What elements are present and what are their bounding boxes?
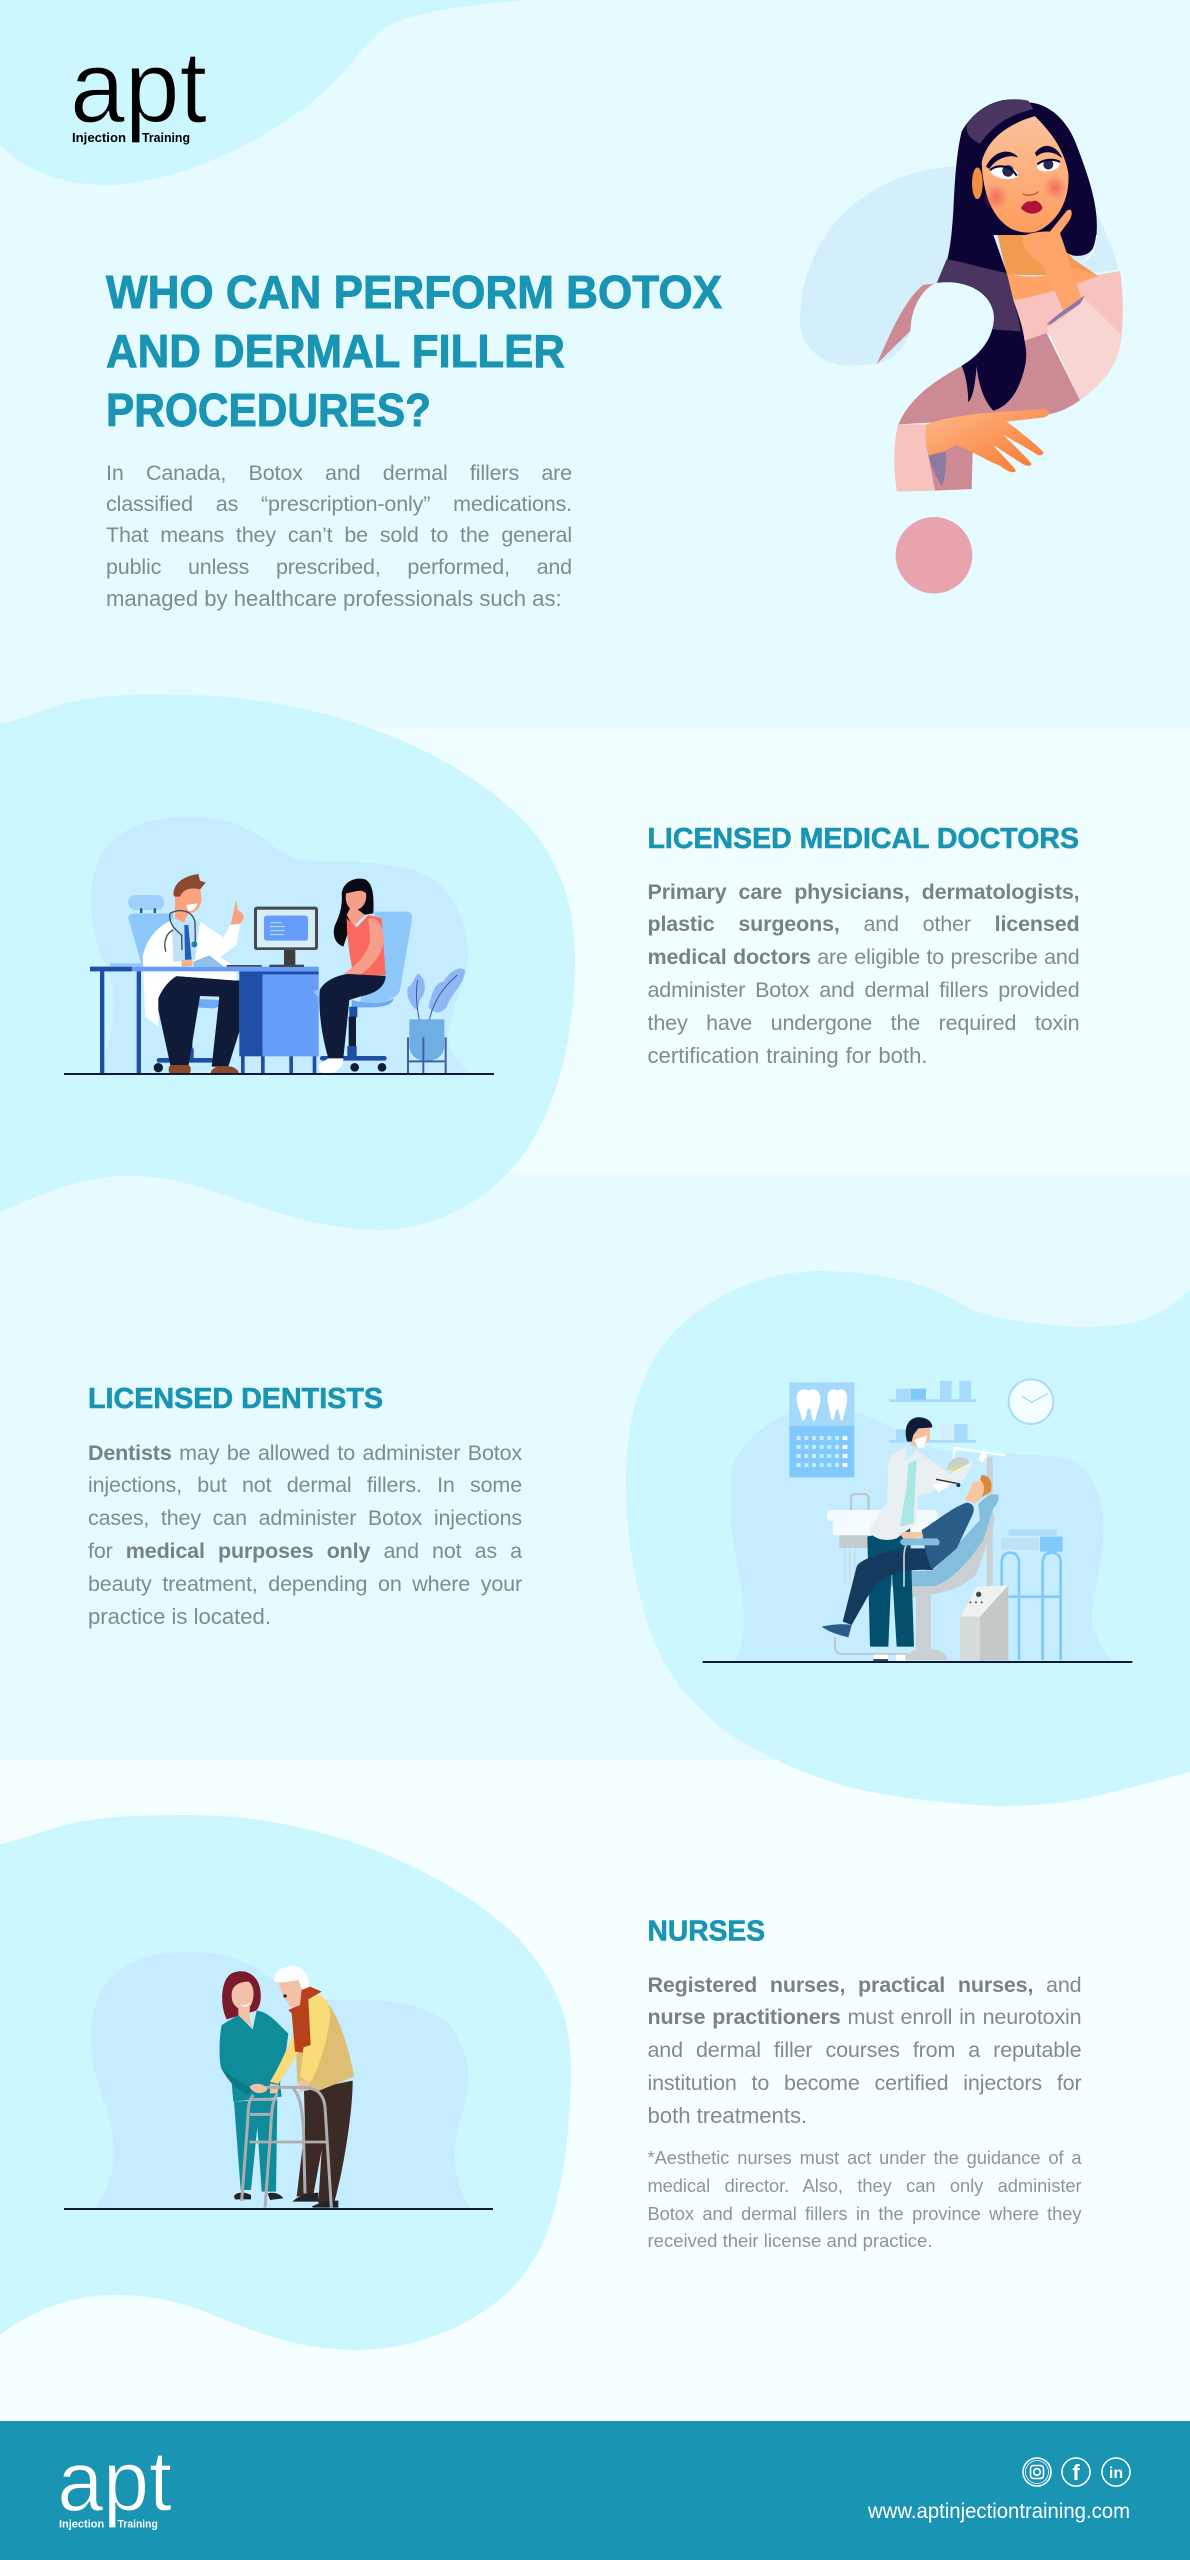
intro paragraph: managed by healthcare professionals such as: xyxy=(106,586,562,611)
intro paragraph: classified as “prescription-only” medications. xyxy=(106,492,572,516)
heading: licensed medical doctors: LICENSED MEDICAL DOCTORS xyxy=(648,823,1079,855)
footer logo: Training xyxy=(118,2518,158,2530)
doctor xyxy=(143,874,244,1074)
walker xyxy=(242,2084,331,2208)
patient xyxy=(822,1475,992,1637)
intro paragraph xyxy=(106,461,572,611)
equipment box xyxy=(960,1585,1008,1661)
blob: doctors background xyxy=(0,694,575,1230)
footer logo: Injection xyxy=(59,2518,104,2530)
social icons xyxy=(1022,2457,1131,2487)
elderly man xyxy=(270,1966,354,2208)
side table xyxy=(1002,1553,1062,1660)
text: nurses footnote: *Aesthetic nurses must act under the guidance of a xyxy=(648,2147,1082,2168)
blob: top left xyxy=(0,0,522,185)
shelves xyxy=(889,1381,976,1443)
intro paragraph: In Canada, Botox and dermal fillers are xyxy=(106,461,572,485)
text: nurses footnote: medical director. Also, they can only administer xyxy=(648,2175,1082,2196)
blue blob xyxy=(800,166,1118,366)
text: doctors: Primary care physicians, dermatologists, xyxy=(648,880,1080,904)
text: doctors: administer Botox and dermal fillers provided xyxy=(648,978,1080,1002)
heading: nurses: NURSES xyxy=(648,1916,765,1948)
text: nurses footnote: received their license and practice. xyxy=(648,2230,932,2251)
text: nurses footnote: Botox and dermal fillers in the province where they xyxy=(648,2202,1082,2224)
text: doctors: medical doctors are eligible to prescribe and xyxy=(648,945,1080,969)
text: doctors xyxy=(648,880,1080,1068)
text: dentists: cases, they can administer Botox injections xyxy=(88,1506,522,1530)
text: doctors: certification training for both. xyxy=(648,1043,928,1068)
hair xyxy=(937,99,1097,411)
inner blob: nurses xyxy=(91,1952,470,2208)
patient xyxy=(318,879,386,1074)
dentist xyxy=(867,1417,987,1662)
text: dentists: practice is located. xyxy=(88,1604,271,1629)
hair lower strand xyxy=(962,330,1026,411)
text: nurses footnote xyxy=(648,2147,1082,2251)
lamp arm xyxy=(947,1448,1005,1587)
icon: facebook: f xyxy=(1072,2460,1080,2485)
doctor chair xyxy=(128,895,223,1072)
footer xyxy=(0,2421,1190,2560)
desk xyxy=(100,971,319,1074)
intro paragraph: public unless prescribed, performed, and xyxy=(106,555,572,579)
tooth poster xyxy=(789,1382,854,1477)
illustration: nurse and elderly man xyxy=(220,1966,354,2208)
hand on chin xyxy=(1022,210,1085,325)
icon: linkedin: in xyxy=(1109,2465,1123,2482)
section background: dentists xyxy=(0,1173,1190,1760)
title: WHO CAN PERFORM BOTOX xyxy=(106,266,722,318)
section background: intro xyxy=(0,0,1190,728)
intro paragraph: That means they can’t be sold to the general xyxy=(106,523,572,547)
text: dentists xyxy=(88,1441,522,1629)
clock xyxy=(1009,1379,1053,1424)
patient chair xyxy=(313,912,412,1072)
dental chair xyxy=(835,1494,999,1660)
illustration: woman in question mark xyxy=(800,99,1123,594)
logo: apt injection training: Injection xyxy=(72,130,126,145)
nurse xyxy=(220,1971,288,2200)
text: dentists: beauty treatment, depending on where your xyxy=(88,1572,522,1596)
text: nurses xyxy=(648,1972,1082,2128)
text: doctors: they have undergone the required toxin xyxy=(648,1011,1080,1035)
text: doctors: plastic surgeons, and other licensed xyxy=(648,912,1080,936)
title: AND DERMAL FILLER xyxy=(106,325,565,377)
icon: instagram xyxy=(1023,2458,1051,2486)
section background: nurses xyxy=(0,1760,1190,2421)
inner blob: doctors xyxy=(91,817,470,1073)
plant xyxy=(407,968,465,1074)
blob: dentists background xyxy=(626,1271,1190,1806)
clothing xyxy=(877,271,1123,492)
question mark dot xyxy=(896,517,972,593)
title xyxy=(106,266,722,436)
neck and chest xyxy=(997,232,1098,300)
inner blob: dentists xyxy=(730,1412,1111,1661)
text: dentists: injections, but not dermal fillers. In some xyxy=(88,1473,522,1497)
ground line xyxy=(703,1661,1132,1663)
title: PROCEDURES? xyxy=(106,384,431,436)
illustration: doctor and patient xyxy=(64,874,494,1075)
text: nurses: Registered nurses, practical nurses, and xyxy=(648,1972,1081,1996)
text: dentists: Dentists may be allowed to administer Botox xyxy=(88,1441,522,1465)
ground line: nurses xyxy=(64,2208,493,2210)
text: nurses: and dermal filler courses from a reputable xyxy=(648,2038,1082,2062)
logo: apt injection training: Training xyxy=(142,130,190,145)
text: nurses: institution to become certified injectors for xyxy=(648,2071,1082,2095)
monitor xyxy=(227,907,318,967)
section background: doctors xyxy=(0,728,1190,1173)
illustration: dentist and patient xyxy=(702,1378,1132,1663)
ground line xyxy=(64,1073,494,1075)
text: nurses: nurse practitioners must enroll in neurotoxin xyxy=(648,2005,1082,2029)
face xyxy=(972,116,1069,233)
text: dentists: for medical purposes only and not as a xyxy=(88,1539,522,1563)
text: nurses: both treatments. xyxy=(648,2103,807,2128)
heading: licensed dentists: LICENSED DENTISTS xyxy=(88,1383,383,1415)
lower hand xyxy=(926,409,1049,472)
sink unit xyxy=(827,1494,938,1583)
blob: nurses background xyxy=(0,1815,571,2350)
desk top xyxy=(90,963,319,971)
question mark hole xyxy=(847,282,994,424)
website: www.aptinjectiontraining.com xyxy=(867,2500,1130,2523)
